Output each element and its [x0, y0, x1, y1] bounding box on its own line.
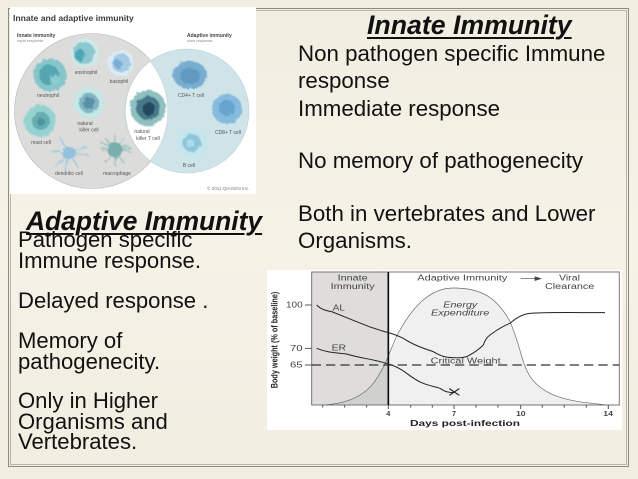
Venn labels: Adaptive immunity [187, 33, 232, 39]
heading: Innate Immunity: Innate Immunity [367, 10, 572, 40]
Venn labels: rapid response [17, 38, 44, 43]
chart labels: Critical Weight [431, 357, 502, 366]
day 4 divider [386, 272, 391, 405]
ER curve [317, 348, 455, 392]
Venn labels: eosinophil [75, 70, 97, 76]
x axis ticks [323, 405, 608, 409]
icon: dendritic cell [51, 138, 88, 171]
Venn labels: macrophage [103, 171, 131, 177]
Venn labels: CD8+ T cell [215, 130, 241, 136]
text block: adaptive immunity points: Immune response. [18, 248, 201, 273]
text block: innate immunity points: Immediate response [298, 96, 500, 121]
chart labels: AL [333, 303, 346, 312]
chart labels: Immunity [331, 282, 375, 291]
Venn labels: © 2011 QIAGEN Inc. [207, 185, 249, 191]
text block: innate immunity points: Both in vertebrates and Lower [298, 201, 595, 226]
Venn labels: dendritic cell [55, 171, 83, 177]
chart labels: Clearance [545, 282, 595, 291]
heading: Adaptive Immunity: Adaptive Immunity [26, 206, 262, 236]
icon: eosinophil [70, 38, 100, 68]
text block: innate immunity points: Non pathogen specific Immune [298, 41, 605, 66]
chart labels: Innate [338, 274, 368, 283]
icon: CD4+ T cell [173, 61, 207, 89]
chart labels: 10 [516, 409, 526, 418]
chart labels: Body weight (% of baseline) [269, 292, 280, 388]
Venn circles [14, 34, 249, 188]
text block: adaptive immunity points: Only in Higher [18, 388, 158, 413]
chart labels: 4 [386, 409, 391, 418]
icon: B cell [176, 128, 208, 158]
cell illustrations [24, 38, 242, 171]
text block: innate immunity points: No memory of pathogenecity [298, 148, 583, 173]
Venn labels: natural [77, 121, 93, 127]
Venn labels: mast cell [31, 140, 51, 146]
chart labels: Days post-infection [410, 418, 520, 428]
Venn labels: basophil [110, 79, 128, 85]
Venn labels: CD4+ T cell [178, 93, 204, 99]
Venn labels: killer T cell [136, 136, 160, 142]
chart labels: Adaptive Immunity [417, 274, 507, 283]
text block: adaptive immunity points: Vertebrates. [18, 429, 137, 454]
Venn labels: B cell [183, 163, 195, 169]
chart labels: Expenditure [431, 308, 490, 317]
text block: innate immunity points [298, 41, 605, 253]
innate phase shading [312, 272, 388, 405]
chart labels: 14 [603, 409, 614, 418]
critical weight line [312, 363, 619, 367]
icon: macrophage [100, 135, 132, 165]
chart labels [269, 274, 614, 428]
Venn labels: natural [134, 129, 150, 135]
plot frame [312, 272, 619, 405]
text block: innate immunity points: response [298, 68, 390, 93]
text block: innate immunity points: Organisms. [298, 228, 412, 253]
text block: adaptive immunity points: Delayed response . [18, 288, 208, 313]
chart labels: 70 [290, 343, 303, 353]
figure title: Innate and adaptive immunity [13, 13, 134, 23]
Venn labels: slow response [187, 38, 213, 43]
chart labels: 100 [286, 300, 303, 310]
chart labels: 7 [452, 409, 456, 418]
chart labels: Viral [559, 274, 580, 283]
text block: adaptive immunity points: Pathogen specific [18, 227, 192, 252]
icon: basophil [108, 50, 134, 76]
Venn labels: neutrophil [37, 93, 59, 99]
Venn labels: Innate immunity [17, 33, 56, 39]
icon: natural killer cell [74, 88, 104, 118]
text block: adaptive immunity points: Organisms and [18, 409, 168, 434]
Venn labels: killer cell [79, 128, 99, 134]
chart labels: ER [332, 343, 346, 352]
icon: natural killer T cell [130, 90, 166, 126]
Venn labels [17, 33, 249, 191]
text block: adaptive immunity points: pathogenecity. [18, 349, 160, 374]
energy expenditure curve [323, 288, 608, 405]
chart labels: 65 [290, 360, 303, 370]
text block: adaptive immunity points [18, 227, 208, 454]
chart labels: Energy [443, 300, 479, 309]
icon: neutrophil [34, 58, 66, 92]
icon: mast cell [24, 105, 56, 137]
death marker [449, 389, 459, 395]
AL curve [317, 305, 605, 358]
text block: adaptive immunity points: Memory of [18, 328, 122, 353]
icon: CD8+ T cell [212, 94, 242, 124]
